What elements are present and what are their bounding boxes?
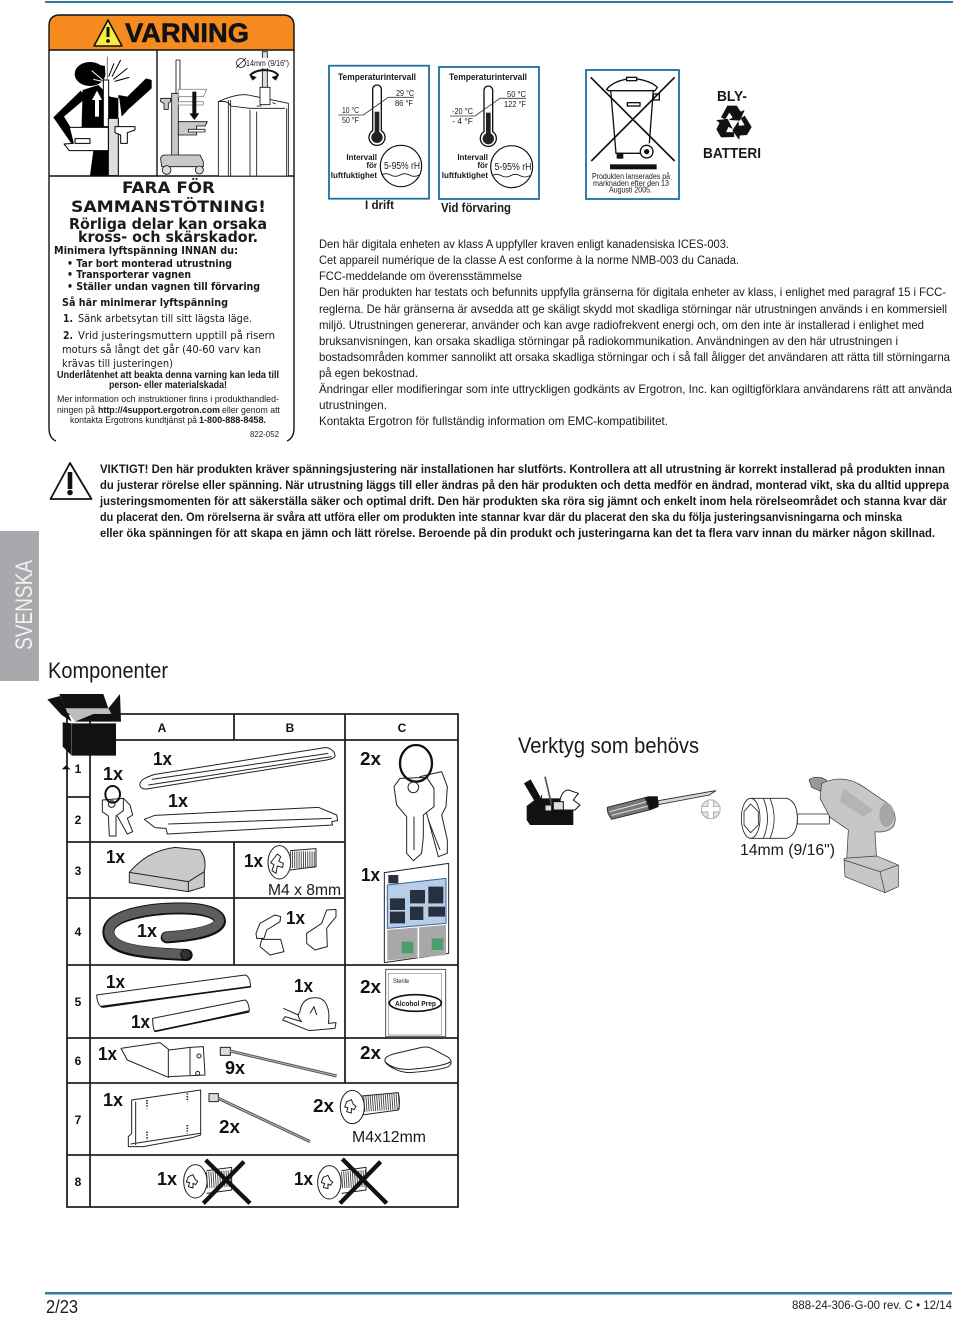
- quantity labels: [98, 749, 381, 1189]
- warning text block: ningen på: [57, 405, 96, 416]
- panel: storage conditions: 122 °F: [504, 99, 526, 109]
- panel: storage conditions: för: [477, 161, 488, 170]
- panel: storage conditions: Temperaturintervall: [449, 72, 527, 83]
- quantity labels: 1x: [98, 1044, 117, 1064]
- panel: operating conditions: 50 °F: [342, 115, 359, 125]
- panel: storage conditions: -20 °C: [452, 106, 473, 116]
- icon: thermometer: [338, 85, 422, 187]
- screw M4 x 8: [268, 846, 316, 879]
- quantity labels: 1x: [106, 972, 125, 992]
- warning text block: FARA FÖR: [122, 178, 215, 197]
- illustration: adjustment nut on riser: [218, 52, 288, 176]
- short rubber strip: [153, 1000, 249, 1032]
- quantity labels: 1x: [157, 1169, 177, 1189]
- warning text block: [54, 178, 280, 439]
- panel: operating conditions: 29 °C: [396, 88, 414, 98]
- quantity labels: 1x: [137, 921, 157, 941]
- illustration: cart lowered: [161, 60, 207, 174]
- panel: operating conditions: Intervall: [346, 153, 377, 162]
- panel: WEEE crossed-out bin: marknaden efter den 13: [593, 179, 669, 188]
- icon: toolbox: [524, 777, 580, 825]
- warning text block: • Ställer undan vagnen till förvaring: [67, 281, 260, 293]
- quantity labels: 2x: [360, 1043, 381, 1063]
- icon: crossed-out wheelie bin: [591, 77, 675, 169]
- alcohol prep pad: [386, 969, 446, 1037]
- quantity labels: 1x: [103, 1090, 123, 1110]
- warning text block: Vrid justeringsmuttern upptill på risern: [78, 329, 275, 342]
- icon: open box: [47, 694, 121, 769]
- flat trim strip: [144, 807, 338, 834]
- row numbers: 3: [75, 864, 82, 878]
- panel: storage conditions: luftfuktighet: [442, 171, 488, 180]
- column headers: [158, 721, 407, 735]
- quantity labels: 2x: [219, 1117, 240, 1137]
- mounting plate: [128, 1090, 201, 1147]
- panel: operating conditions: Temperaturintervall: [338, 72, 416, 83]
- quantity labels: 2x: [360, 749, 381, 769]
- quantity labels: 1x: [168, 791, 188, 811]
- icon: hex socket: [741, 798, 829, 838]
- panel: operating conditions: för: [366, 161, 377, 170]
- row numbers: 6: [75, 1054, 82, 1068]
- text block: compliance statement: Kontakta Ergotron för fullständig information om EMC-kompatibilitet.: [319, 414, 668, 428]
- warning text block: SAMMANSTÖTNING!: [71, 197, 266, 216]
- warning text block: kontakta Ergotrons kundtjänst på: [70, 415, 198, 426]
- icon: caution triangle: [50, 463, 92, 499]
- warning text block: 1.: [63, 313, 73, 325]
- cable tie row 6: [220, 1047, 337, 1076]
- footer: [45, 1292, 952, 1317]
- warning text block: • Tar bort monterad utrustning: [67, 258, 232, 270]
- quantity labels: 1x: [294, 1169, 313, 1189]
- page number: 2/23: [46, 1297, 78, 1317]
- panel: storage conditions: 5-95% rH: [494, 162, 532, 173]
- panel: lead battery recycling: [703, 88, 761, 162]
- panel: operating conditions: [329, 66, 429, 212]
- icon: thermometer: [450, 86, 533, 188]
- icon: phillips screwdriver: [607, 791, 720, 819]
- warning text block: Underlåtenhet att beakta denna varning kan leda till: [57, 369, 279, 381]
- text block: compliance statement: FCC-meddelande om överensstämmelse: [319, 269, 522, 283]
- screw size labels: M4x12mm: [352, 1129, 426, 1146]
- crossed-out screw 2: [318, 1159, 387, 1203]
- instruction poster: [384, 863, 449, 963]
- heading: Komponenter: Komponenter: [48, 658, 168, 683]
- socket size label: 14mm (9/16"): [740, 842, 835, 859]
- panel: operating conditions: 86 °F: [395, 98, 413, 108]
- panel: storage conditions: 50 °C: [507, 89, 526, 99]
- rounded pad: [385, 1047, 451, 1073]
- row numbers: 2: [75, 813, 82, 827]
- quantity labels: 1x: [286, 908, 305, 928]
- small keys: [102, 786, 133, 836]
- table: component grid: [47, 694, 458, 1207]
- row numbers: [75, 762, 82, 1189]
- text block: compliance statement: [319, 237, 952, 428]
- panel: operating conditions: 10 °C: [342, 105, 359, 115]
- text block: compliance statement: på egen bekostnad.: [319, 366, 418, 380]
- warning text block: 822-052: [250, 429, 279, 439]
- quantity labels: 1x: [361, 865, 380, 885]
- row numbers: 5: [75, 995, 82, 1009]
- angled bracket: [121, 1043, 205, 1077]
- long trim bar: [140, 748, 335, 789]
- panel: safety warning label: [49, 15, 294, 441]
- upper rows artwork: [102, 745, 449, 963]
- row numbers: 4: [75, 925, 82, 939]
- text block: VIKTIGT notice: [99, 462, 949, 540]
- panel: tools required: [518, 733, 898, 893]
- table lines: [67, 714, 458, 1207]
- quantity labels: 2x: [360, 977, 381, 997]
- warning text block: eller genom att: [222, 405, 280, 416]
- screw size labels: M4 x 8mm: [268, 882, 341, 899]
- text block: compliance statement: bruksanvisningen, kan orsaka skadliga störningar på radiokommunikation. Användningen av den här utrustningen i: [319, 334, 898, 348]
- warning text block: Rörliga delar kan orsaka: [69, 215, 267, 233]
- column headers: B: [286, 721, 295, 735]
- dimension label: nut size: 14mm (9/16"): [246, 58, 289, 68]
- warning header banner: [49, 15, 294, 50]
- caption: Vid förvaring: Vid förvaring: [441, 201, 511, 215]
- screw M4 x 12: [340, 1090, 399, 1124]
- panel: WEEE crossed-out bin: [586, 70, 679, 199]
- warning text block: kross- och skärskador.: [78, 228, 258, 246]
- warning text block: 1-800-888-8458.: [199, 415, 266, 426]
- side tab: SVENSKA: SVENSKA: [11, 560, 38, 650]
- alcohol prep labels: Sterile: [393, 978, 409, 985]
- panel: WEEE crossed-out bin: Augusti 2005.: [609, 186, 652, 194]
- column headers: A: [158, 721, 167, 735]
- warning text block: 2.: [63, 330, 73, 342]
- foam tube: [108, 908, 220, 959]
- heading: Verktyg som behövs: Verktyg som behövs: [518, 733, 699, 758]
- panel: operating conditions: 5-95% rH: [384, 161, 420, 172]
- cable tie row 7: [209, 1094, 310, 1142]
- icon: cordless drill: [809, 777, 898, 893]
- document number: 888-24-306-G-00 rev. C • 12/14: [792, 1298, 952, 1312]
- row numbers: 8: [75, 1175, 82, 1189]
- warning text block: moturs så långt det går (40-60 varv kan: [62, 343, 261, 356]
- panel: storage conditions: [439, 67, 539, 215]
- cable clips: [256, 915, 284, 955]
- lower rows artwork: [97, 969, 451, 1203]
- panel: storage conditions: - 4 °F: [452, 116, 473, 126]
- alcohol prep labels: Alcohol Prep: [395, 999, 436, 1008]
- large keys: [394, 745, 447, 861]
- warning text block: Så här minimerar lyftspänning: [62, 296, 228, 309]
- quantity labels: 2x: [313, 1096, 334, 1116]
- quantity labels: 1x: [294, 976, 313, 996]
- quantity labels: 1x: [153, 749, 172, 769]
- heading: VARNING: VARNING: [125, 18, 249, 48]
- text block: compliance statement: Den här digitala enheten av klass A uppfyller kraven enligt kanadensiska ICES-003.: [319, 237, 729, 251]
- panel: storage conditions: Intervall: [457, 153, 488, 162]
- row numbers: 7: [75, 1113, 82, 1127]
- warning text block: Mer information och instruktioner finns i produkthandled-: [57, 394, 279, 405]
- panel: lead battery recycling: BLY-: [717, 88, 747, 105]
- icon: recycling arrows: [712, 106, 755, 143]
- warning text block: Minimera lyftspänning INNAN du:: [54, 245, 238, 257]
- quantity labels: 1x: [103, 764, 123, 784]
- alcohol prep labels: [393, 978, 436, 1008]
- icon: yellow warning triangle: [94, 20, 122, 46]
- screw size labels: [268, 882, 426, 1146]
- warning text block: person- eller materialskada!: [109, 380, 227, 391]
- column headers: C: [398, 721, 407, 735]
- quantity labels: 9x: [225, 1058, 245, 1078]
- warning text block: krävas till justeringen): [62, 358, 173, 370]
- crossed-out screw 1: [184, 1160, 250, 1203]
- quantity labels: 1x: [131, 1012, 150, 1032]
- label frame: [49, 50, 294, 441]
- row numbers: 1: [75, 762, 82, 776]
- text block: compliance statement: miljö. Utrustningen genererar, använder och kan avge radiofrekvent energi och, om den inte är installerad i enlighet med: [319, 318, 924, 332]
- quantity labels: 1x: [244, 851, 263, 871]
- side tab: SVENSKA: [0, 531, 39, 681]
- panel: operating conditions: luftfuktighet: [331, 171, 377, 180]
- warning text block: Sänk arbetsytan till sitt lägsta läge.: [78, 313, 252, 325]
- warning text block: http://4support.ergotron.com: [98, 405, 220, 416]
- illustration: person struck by rising column: [53, 57, 152, 176]
- panel: lead battery recycling: BATTERI: [703, 145, 761, 162]
- text block: compliance statement: Cet appareil numérique de la classe A est conforme à la norme NMB-003 du Canada.: [319, 253, 739, 267]
- gray wedge cover: [129, 847, 205, 892]
- cable saddle: [283, 998, 336, 1031]
- panel: WEEE crossed-out bin: Produkten lanserades på: [592, 172, 670, 181]
- caption: I drift: I drift: [365, 198, 394, 212]
- warning text block: • Transporterar vagnen: [67, 269, 191, 281]
- quantity labels: 1x: [106, 847, 125, 867]
- text block: compliance statement: utrustningen.: [319, 398, 387, 412]
- long rubber strip: [97, 975, 251, 1007]
